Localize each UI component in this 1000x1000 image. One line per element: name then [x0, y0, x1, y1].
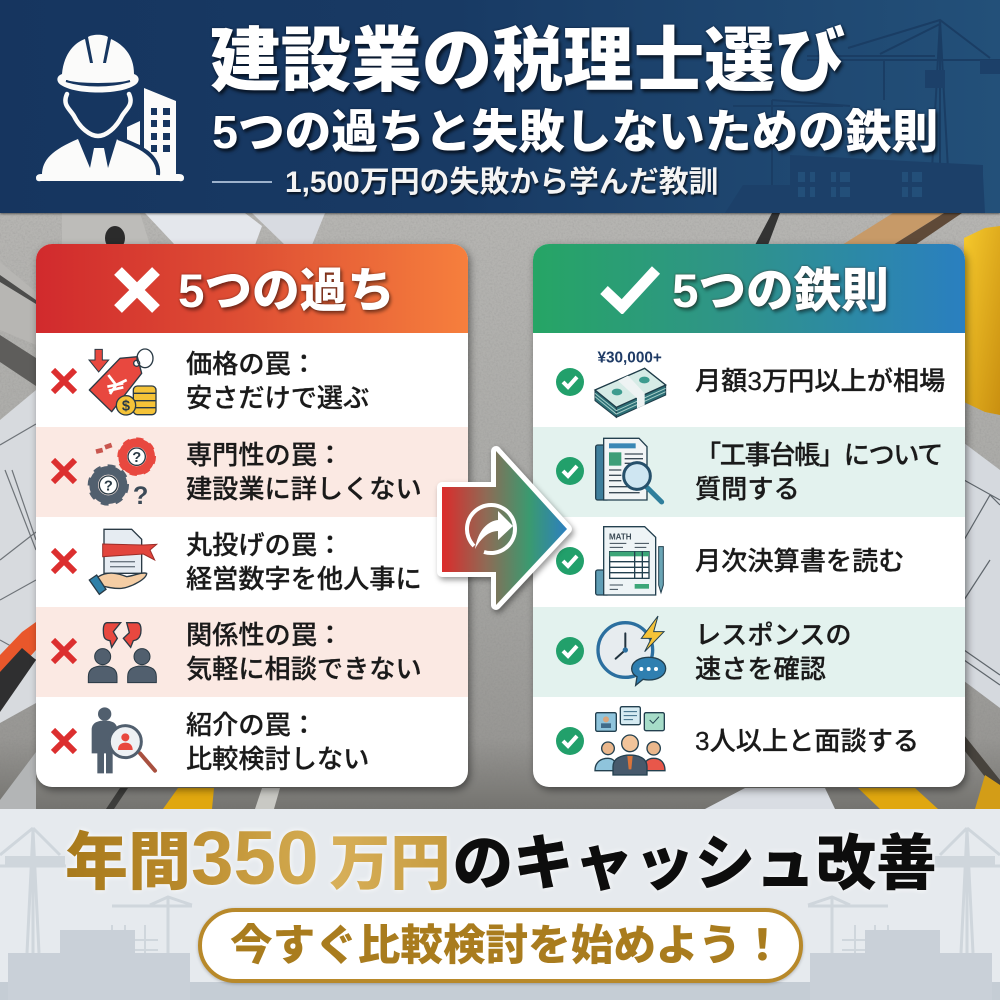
- icon: person with magnifier: [92, 707, 158, 774]
- icon: green check: [556, 727, 584, 755]
- icon: red cross: [51, 548, 77, 574]
- icon: price tag with yen and coins: [88, 348, 157, 416]
- title line 2: 5つの過ちと失敗しないための鉄則: [212, 106, 938, 158]
- icon: large cross: [114, 267, 160, 313]
- row: monthly fee: [556, 350, 945, 418]
- panel heading: 5つの鉄則: [533, 244, 965, 333]
- text: 質問する: [695, 474, 800, 504]
- headline: 年間350万円のキャッシュ改善: [65, 816, 937, 901]
- text: 関係性の罠：: [186, 620, 343, 650]
- icon: gears with question marks: ?: [133, 482, 148, 510]
- text: 専門性の罠：: [186, 440, 343, 470]
- text: 「工事台帳」について: [695, 440, 942, 470]
- icon: gears with question marks: ?: [104, 478, 113, 494]
- icon: green check: [556, 637, 584, 665]
- panel: 5 rules: [533, 244, 965, 787]
- icon: statement with table and pen: MATH: [609, 532, 632, 541]
- heading text: 5つの鉄則: [672, 265, 889, 318]
- panel: header band: [0, 0, 1000, 213]
- text: 紹介の罠：: [186, 710, 317, 740]
- row: referral trap: [51, 707, 369, 774]
- text: レスポンスの: [695, 620, 852, 650]
- row: price trap: [51, 348, 369, 416]
- row: expertise trap: [36, 427, 468, 517]
- text: 価格の罠：: [186, 349, 317, 379]
- panel heading: 5つの過ち: [36, 244, 468, 333]
- subtitle rule: [212, 181, 272, 183]
- text: [186, 620, 422, 684]
- text: 月額3万円以上が相場: [695, 366, 945, 396]
- subtitle: 1,500万円の失敗から学んだ教訓: [285, 166, 718, 199]
- footer background: construction silhouettes: [0, 827, 1000, 1000]
- call to action button: [198, 908, 803, 983]
- row: monthly statements: [556, 526, 904, 596]
- icon: price tag with yen and coins: $: [122, 399, 130, 415]
- panel: 5 mistakes: [36, 244, 468, 787]
- icon: two people with broken speech bubbles: [88, 622, 157, 684]
- text: [695, 440, 942, 504]
- panel: footer band: [0, 809, 1000, 1000]
- text: [186, 530, 422, 594]
- text: 丸投げの罠：: [186, 530, 343, 560]
- text: 安さだけで選ぶ: [186, 383, 369, 413]
- heading text: 5つの過ち: [178, 265, 395, 318]
- icon: green check: [556, 368, 584, 396]
- arrow: mistakes to rules: [435, 446, 577, 616]
- icon: red cross: [51, 458, 77, 484]
- icon: gears with question marks: [88, 437, 156, 510]
- row: interview three: [556, 706, 919, 776]
- icon: statement with table and pen: [595, 526, 664, 596]
- text: 速さを確認: [695, 654, 826, 684]
- icon: green check: [556, 457, 584, 485]
- icon: clock, lightning and chat bubble: [596, 616, 666, 687]
- text: 比較検討しない: [186, 744, 369, 774]
- icon: red cross: [51, 728, 77, 754]
- icon: three people with speech bubbles: [594, 706, 666, 776]
- text: 3人以上と面談する: [695, 726, 919, 756]
- row: relationship trap: [36, 607, 468, 697]
- text: [186, 349, 369, 413]
- icon: large check: [600, 266, 660, 314]
- icon: builder in hard hat with building: [36, 34, 184, 182]
- row: outsourcing trap: [51, 528, 422, 596]
- text: 経営数字を他人事に: [186, 564, 422, 594]
- icon: gears with question marks: ?: [132, 450, 141, 466]
- header background: crane and building silhouette: [733, 19, 1000, 213]
- icon: red cross: [51, 368, 77, 394]
- call to action text: 今すぐ比較検討を始めよう！: [230, 922, 784, 970]
- icon: cash stack with price: [594, 350, 667, 418]
- icon: green check: [556, 547, 584, 575]
- title line 1: 建設業の税理士選び: [210, 21, 845, 100]
- icon: red cross: [51, 638, 77, 664]
- text: [186, 710, 369, 774]
- row: response speed: [533, 607, 965, 697]
- icon: document under magnifier: [595, 438, 664, 504]
- text: 月次決算書を読む: [695, 546, 904, 576]
- icon: blindfolded document on a hand: [88, 528, 158, 596]
- text: [695, 620, 852, 684]
- icon: cash stack with price: ¥30,000+: [597, 350, 662, 367]
- row: job ledger: [533, 427, 965, 517]
- text: 建設業に詳しくない: [186, 474, 422, 504]
- text: [186, 440, 422, 504]
- text: 気軽に相談できない: [186, 654, 422, 684]
